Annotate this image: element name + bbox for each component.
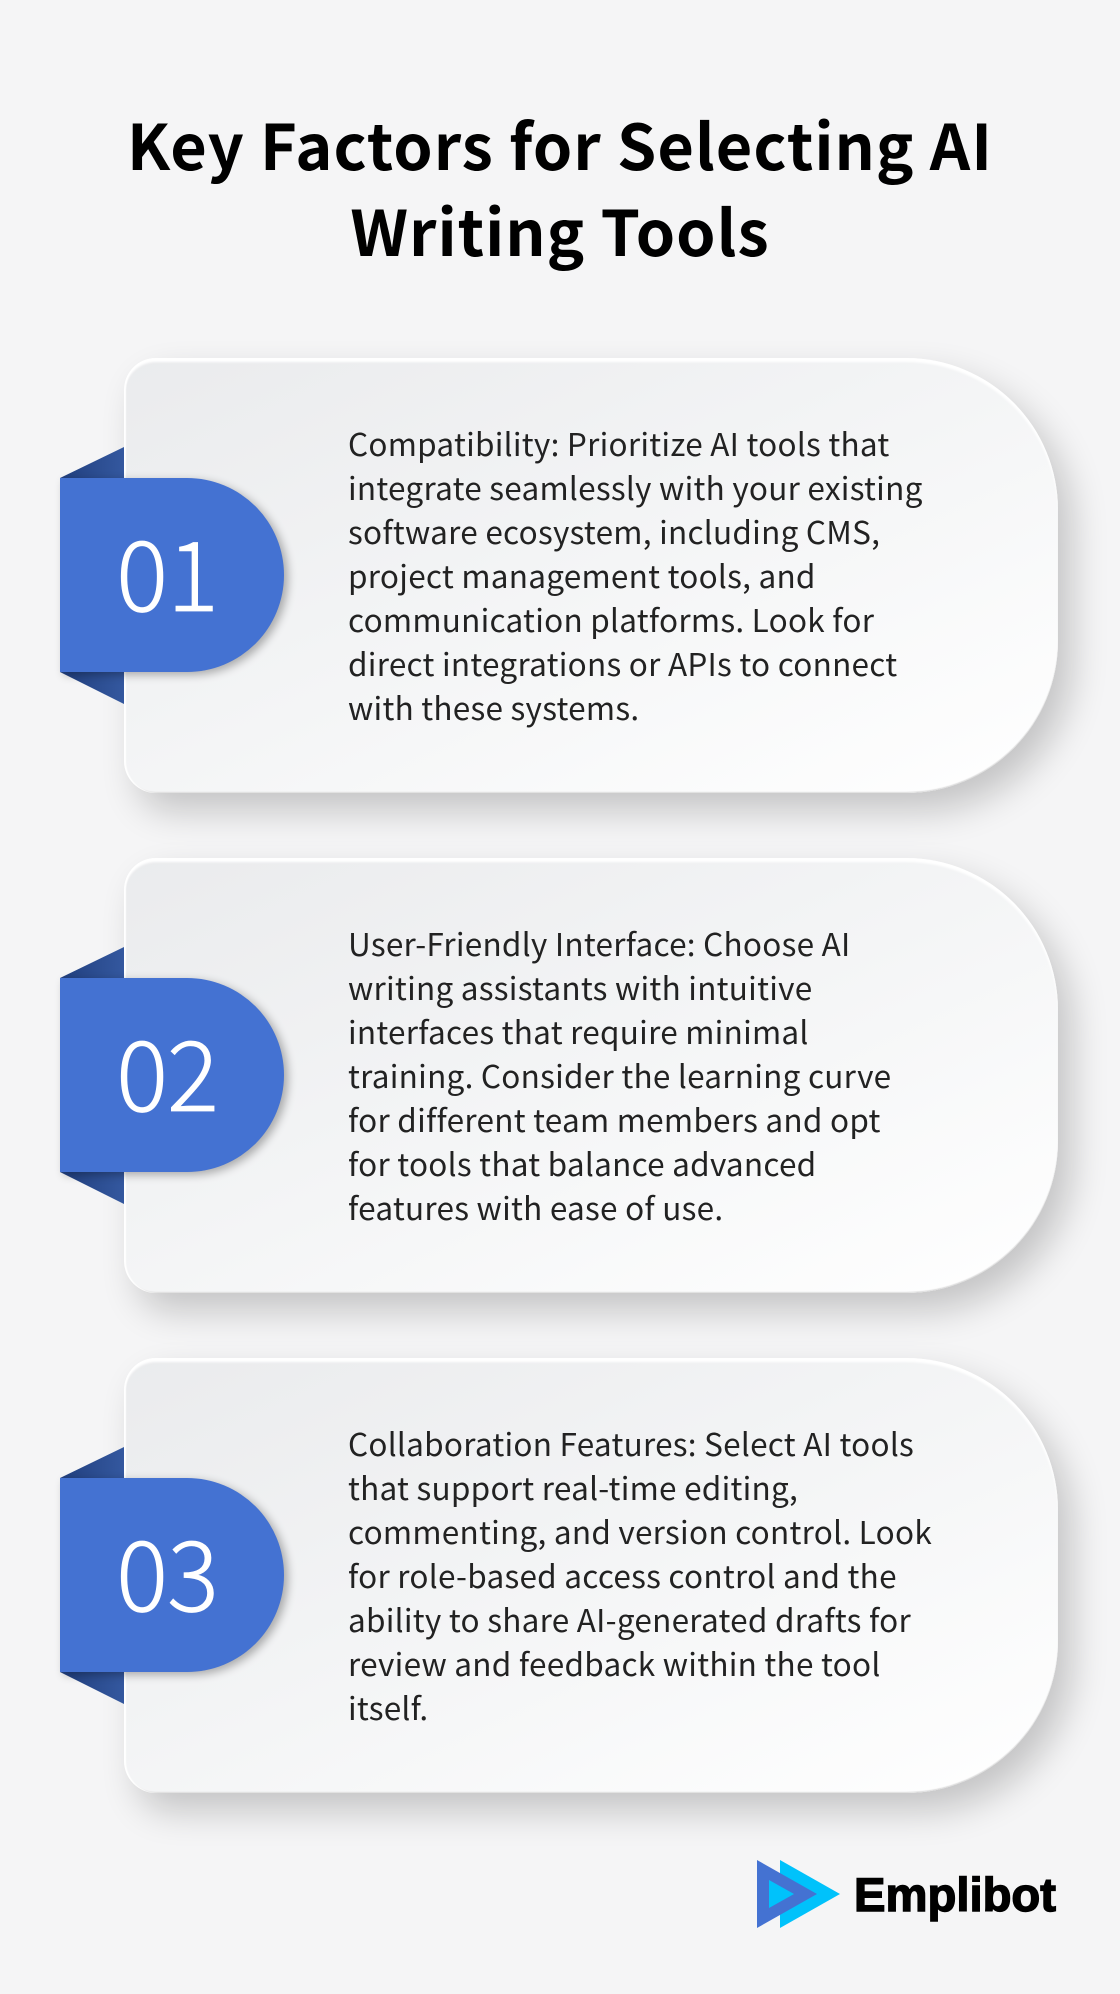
- description text: for role-based access control and the: [348, 1552, 897, 1598]
- panel: factor 02 user-friendly interface: [58, 858, 1088, 1328]
- description text: project management tools, and: [348, 552, 816, 598]
- number: 01: [116, 498, 218, 639]
- description text: [348, 920, 891, 1230]
- number badge: [60, 1478, 284, 1672]
- description text: review and feedback within the tool: [348, 1640, 881, 1686]
- title: Key Factors for Selecting AI: [127, 98, 993, 189]
- description text: [348, 420, 923, 730]
- ribbon folds: [60, 447, 124, 704]
- description text: with these systems.: [348, 684, 639, 730]
- description text: that support real-time editing,: [348, 1464, 798, 1510]
- description text: commenting, and version control. Look: [348, 1508, 932, 1554]
- ribbon folds: [60, 947, 124, 1204]
- description text: [348, 1420, 932, 1730]
- logo: Emplibot: [757, 1860, 1056, 1928]
- card background: [124, 358, 1058, 793]
- description text: writing assistants with intuitive: [348, 964, 812, 1010]
- title: Writing Tools: [350, 184, 770, 275]
- number badge: [60, 978, 284, 1172]
- description text: ability to share AI-generated drafts for: [348, 1596, 911, 1642]
- card background: [124, 858, 1058, 1293]
- description text: training. Consider the learning curve: [348, 1052, 891, 1098]
- description text: for different team members and opt: [348, 1096, 881, 1142]
- description text: integrate seamlessly with your existing: [348, 464, 923, 510]
- card background: [124, 1358, 1058, 1793]
- number: 03: [116, 1498, 218, 1639]
- description text: User-Friendly Interface: Choose AI: [348, 920, 851, 966]
- description text: communication platforms. Look for: [348, 596, 874, 642]
- description text: itself.: [348, 1684, 428, 1730]
- description text: software ecosystem, including CMS,: [348, 508, 880, 554]
- panel: factor 01 compatibility: [58, 358, 1088, 828]
- description text: features with ease of use.: [348, 1184, 723, 1230]
- description text: interfaces that require minimal: [348, 1008, 809, 1054]
- ribbon folds: [60, 1447, 124, 1704]
- icon: play triangles: [757, 1860, 840, 1928]
- description text: Collaboration Features: Select AI tools: [348, 1420, 914, 1466]
- number badge: [60, 478, 284, 672]
- wordmark: Emplibot: [854, 1868, 1056, 1921]
- description text: direct integrations or APIs to connect: [348, 640, 897, 686]
- number: 02: [116, 998, 218, 1139]
- title: [127, 98, 993, 275]
- description text: for tools that balance advanced: [348, 1140, 816, 1186]
- panel: factor 03 collaboration features: [58, 1358, 1088, 1828]
- description text: Compatibility: Prioritize AI tools that: [348, 420, 890, 466]
